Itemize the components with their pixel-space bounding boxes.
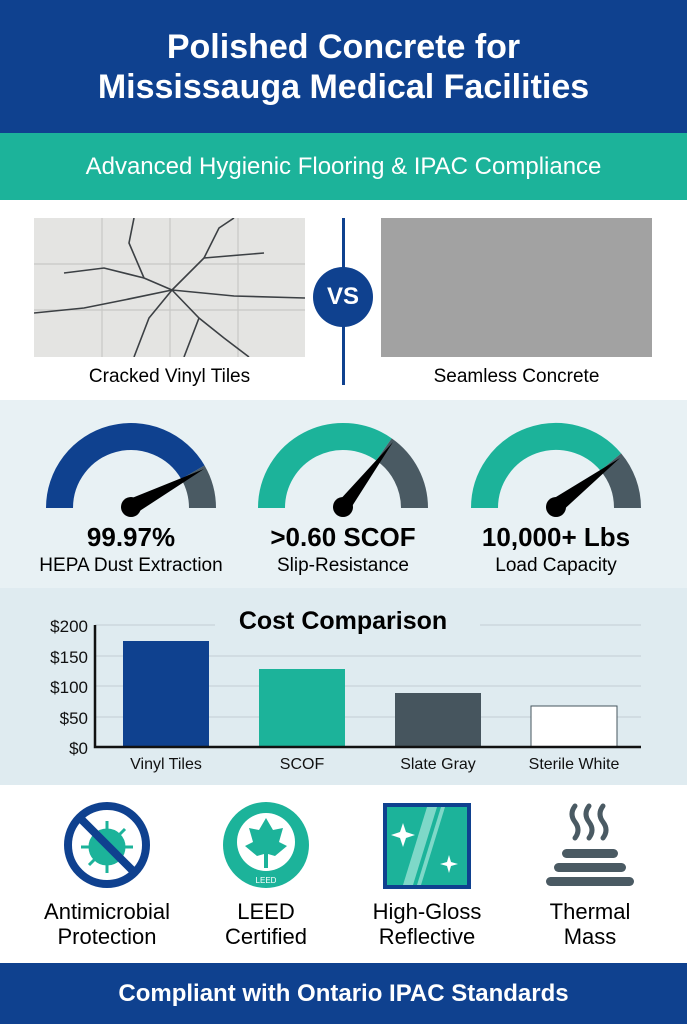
- bar chart: $50: [60, 709, 88, 728]
- chart title: Cost Comparison: [239, 607, 447, 635]
- header: title: Mississauga Medical Facilities: [98, 68, 589, 106]
- stat: slip resistance: Slip-Resistance: [277, 555, 409, 576]
- label: thermal mass: [550, 899, 630, 949]
- stat: slip resistance: >0.60 SCOF: [270, 522, 416, 552]
- stat: load capacity: Load Capacity: [495, 555, 617, 576]
- label: thermal mass: Thermal: [550, 899, 630, 924]
- gauge 1: [60, 436, 628, 508]
- label: high gloss: Reflective: [379, 924, 475, 949]
- label: seamless concrete: Seamless Concrete: [434, 366, 599, 387]
- stat: HEPA dust extraction: [39, 522, 223, 576]
- stat: slip resistance: [270, 522, 416, 576]
- label: LEED: [225, 899, 307, 949]
- header: title: Polished Concrete for: [167, 28, 520, 66]
- subtitle band: [0, 133, 687, 200]
- bar chart: Vinyl Tiles: [130, 756, 202, 773]
- image: cracked vinyl tiles: [34, 218, 305, 357]
- stat: HEPA dust extraction: HEPA Dust Extraction: [39, 555, 223, 576]
- footer: Compliant with Ontario IPAC Standards: [118, 980, 569, 1007]
- label: antimicrobial: Protection: [57, 924, 157, 949]
- stat: load capacity: [482, 522, 630, 576]
- label: cracked vinyl tiles: Cracked Vinyl Tiles: [89, 366, 250, 387]
- features panel: [0, 785, 687, 963]
- stat: load capacity: 10,000+ Lbs: [482, 522, 630, 552]
- comparison panel: [0, 200, 687, 400]
- icon: LEED: [223, 802, 309, 888]
- gauge charts: [46, 422, 641, 517]
- bar chart: [50, 617, 641, 773]
- bar chart: $100: [50, 678, 88, 697]
- bar chart: $200: [50, 617, 88, 636]
- subtitle band: Advanced Hygienic Flooring & IPAC Compliance: [86, 153, 601, 180]
- divider with VS badge: [313, 218, 373, 385]
- label: high gloss: [373, 899, 481, 949]
- bar chart: $150: [50, 648, 88, 667]
- bar chart: Sterile White: [529, 756, 619, 773]
- bar chart: SCOF: [280, 756, 324, 773]
- label: LEED: Certified: [225, 924, 307, 949]
- label: high gloss: High-Gloss: [373, 899, 481, 924]
- cost comparison panel: [0, 588, 687, 785]
- header: title: [0, 0, 687, 133]
- label: thermal mass: Mass: [564, 924, 616, 949]
- bar chart: Slate Gray: [400, 756, 476, 773]
- label: antimicrobial: Antimicrobial: [44, 899, 170, 924]
- icon: thermal mass: [546, 804, 634, 886]
- label: antimicrobial: [44, 899, 170, 949]
- label: LEED: LEED: [237, 899, 295, 924]
- icon: LEED: LEED: [256, 876, 277, 885]
- footer: [0, 963, 687, 1024]
- icon: antimicrobial: [64, 802, 150, 888]
- gauges panel: [0, 400, 687, 588]
- image: seamless concrete: [381, 218, 652, 357]
- icon: high gloss: [383, 803, 471, 889]
- divider with VS badge: VS: [327, 283, 359, 310]
- bar chart: $0: [69, 739, 88, 758]
- stat: HEPA dust extraction: 99.97%: [87, 522, 175, 552]
